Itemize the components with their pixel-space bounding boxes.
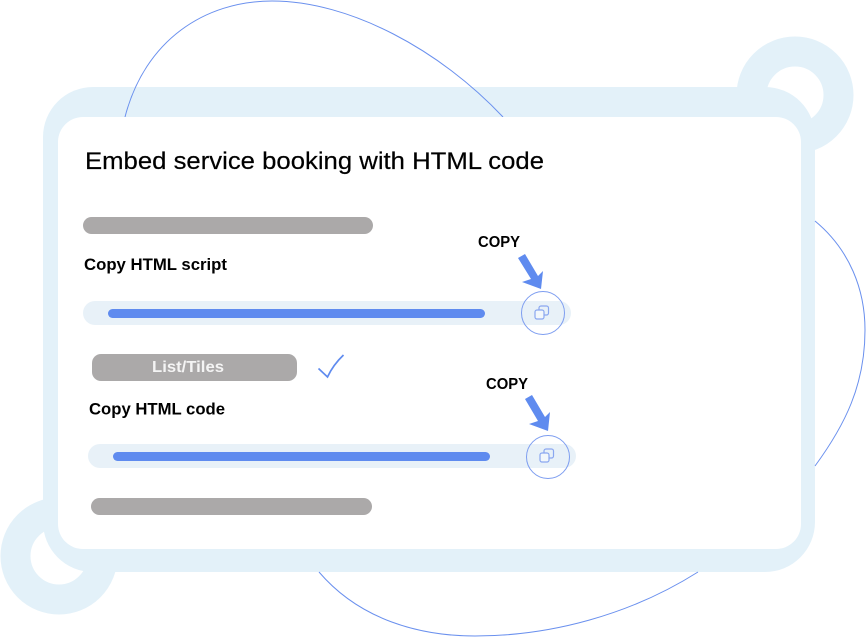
field track (83, 301, 571, 325)
code field (88, 436, 576, 478)
title: Embed service booking with HTML code (85, 148, 544, 175)
list/tiles button: List/Tiles (152, 359, 224, 376)
decorative blob outline: bottom (319, 572, 698, 636)
arrow: copy 2 (525, 395, 550, 431)
label: copy 2: COPY (486, 376, 528, 393)
copy button (526, 436, 570, 478)
decorative ring: top right (752, 52, 838, 138)
icon: copy (540, 449, 554, 462)
panel: outer frame (43, 87, 815, 572)
panel: inner card (58, 117, 801, 549)
field progress bar (108, 309, 485, 318)
decorative blob outline: top (125, 1, 503, 117)
field progress bar (113, 452, 490, 461)
placeholder bar: top (83, 217, 373, 234)
decorative ring: bottom left (16, 512, 102, 600)
icon: copy (535, 306, 548, 319)
script field (83, 292, 571, 334)
list/tiles button (92, 354, 297, 381)
icon: check mark (318, 355, 344, 377)
label: copy html script: Copy HTML script (84, 256, 228, 274)
arrow: copy 1 (518, 254, 543, 289)
label: copy html code: Copy HTML code (89, 400, 225, 418)
field track (88, 444, 576, 468)
placeholder bar: bottom (91, 498, 372, 515)
label: copy 1: COPY (478, 234, 520, 251)
decorative blob outline: right (815, 221, 865, 466)
copy button (522, 292, 564, 334)
